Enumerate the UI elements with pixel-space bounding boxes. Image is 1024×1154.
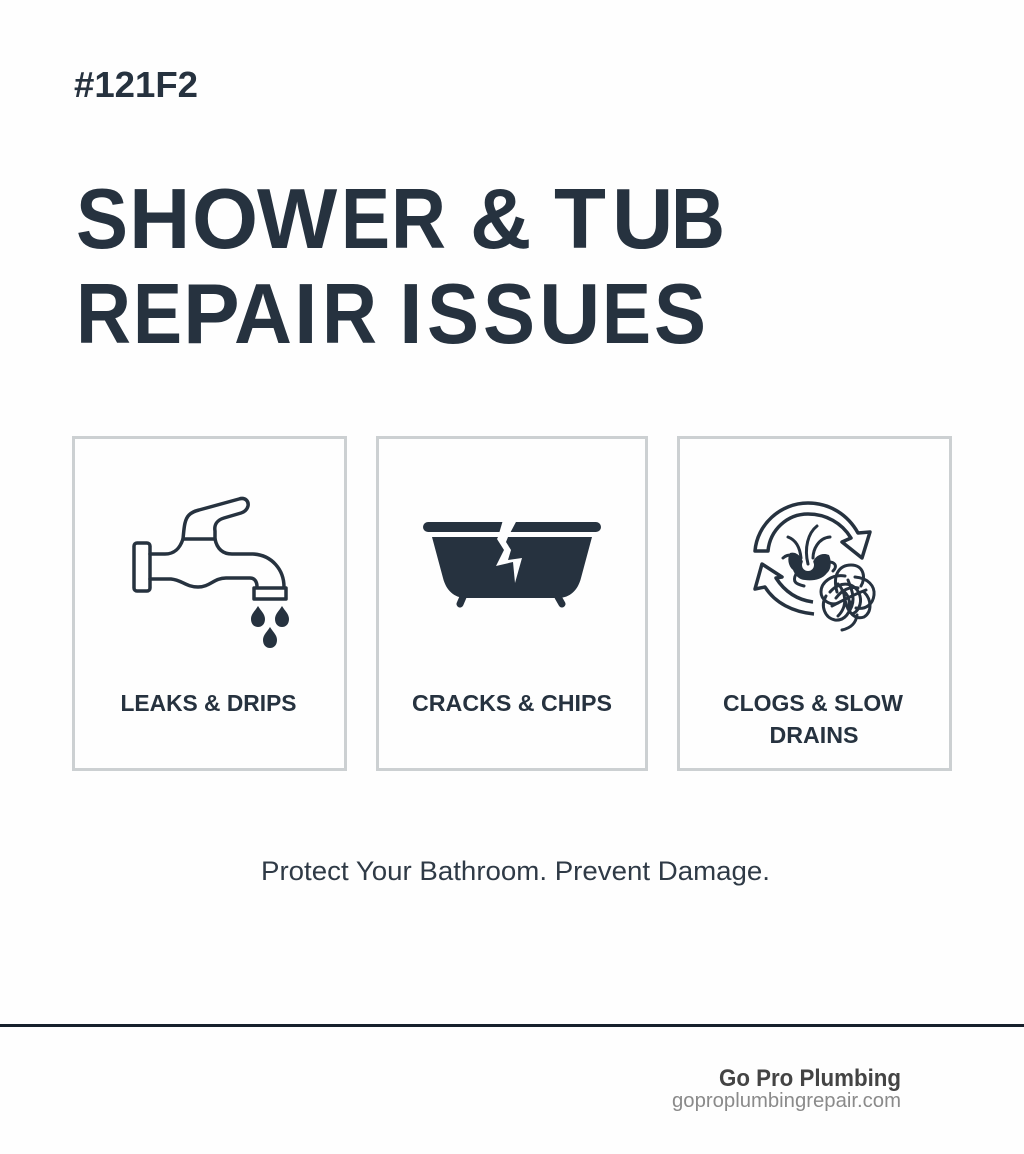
title: U — [539, 267, 600, 362]
panel: leaks and drips — [74, 438, 346, 770]
icon: circular arrow top — [755, 503, 870, 558]
title: W — [257, 172, 338, 267]
icon: circular arrow bottom — [755, 564, 814, 614]
tagline: Protect Your Bathroom. Prevent Damage. — [261, 856, 770, 886]
title — [76, 172, 725, 362]
panel: cracks and chips — [378, 438, 646, 770]
label: clogs and slow drains: DRAINS — [770, 722, 858, 748]
title: O — [192, 172, 258, 267]
icon: cracked bathtub — [423, 520, 601, 604]
footer: company details: Go Pro Plumbing — [719, 1065, 901, 1092]
icon: hair ball — [821, 565, 874, 630]
title: B — [671, 172, 725, 267]
title: S — [76, 172, 128, 267]
title: U — [612, 172, 673, 267]
icon: dripping faucet — [134, 498, 289, 648]
title: S — [483, 267, 535, 362]
icon: drain blob with hair — [783, 526, 835, 586]
title: I — [399, 267, 423, 362]
title: E — [341, 172, 390, 267]
panel: clogs and slow drains — [678, 438, 950, 770]
title: R — [322, 267, 377, 362]
title: R — [76, 267, 131, 362]
title: & — [470, 172, 531, 267]
title: H — [129, 172, 190, 267]
tag: #121F2: #121F2 — [74, 64, 198, 105]
title: I — [294, 267, 318, 362]
footer: company details: goproplumbingrepair.com — [672, 1090, 901, 1112]
title: T — [554, 172, 606, 267]
label: clogs and slow drains: CLOGS & SLOW — [723, 690, 903, 716]
footer: company details — [672, 1065, 901, 1112]
icon: clogged drain — [755, 503, 874, 630]
title: S — [654, 267, 706, 362]
label: clogs and slow drains — [723, 690, 903, 748]
title: E — [133, 267, 182, 362]
title: A — [234, 267, 292, 362]
icon: water drops — [251, 606, 289, 648]
title: R — [391, 172, 446, 267]
label: leaks and drips: LEAKS & DRIPS — [120, 690, 296, 716]
title: P — [183, 267, 240, 362]
label: cracks and chips: CRACKS & CHIPS — [412, 690, 612, 716]
title: S — [427, 267, 479, 362]
title: E — [602, 267, 651, 362]
